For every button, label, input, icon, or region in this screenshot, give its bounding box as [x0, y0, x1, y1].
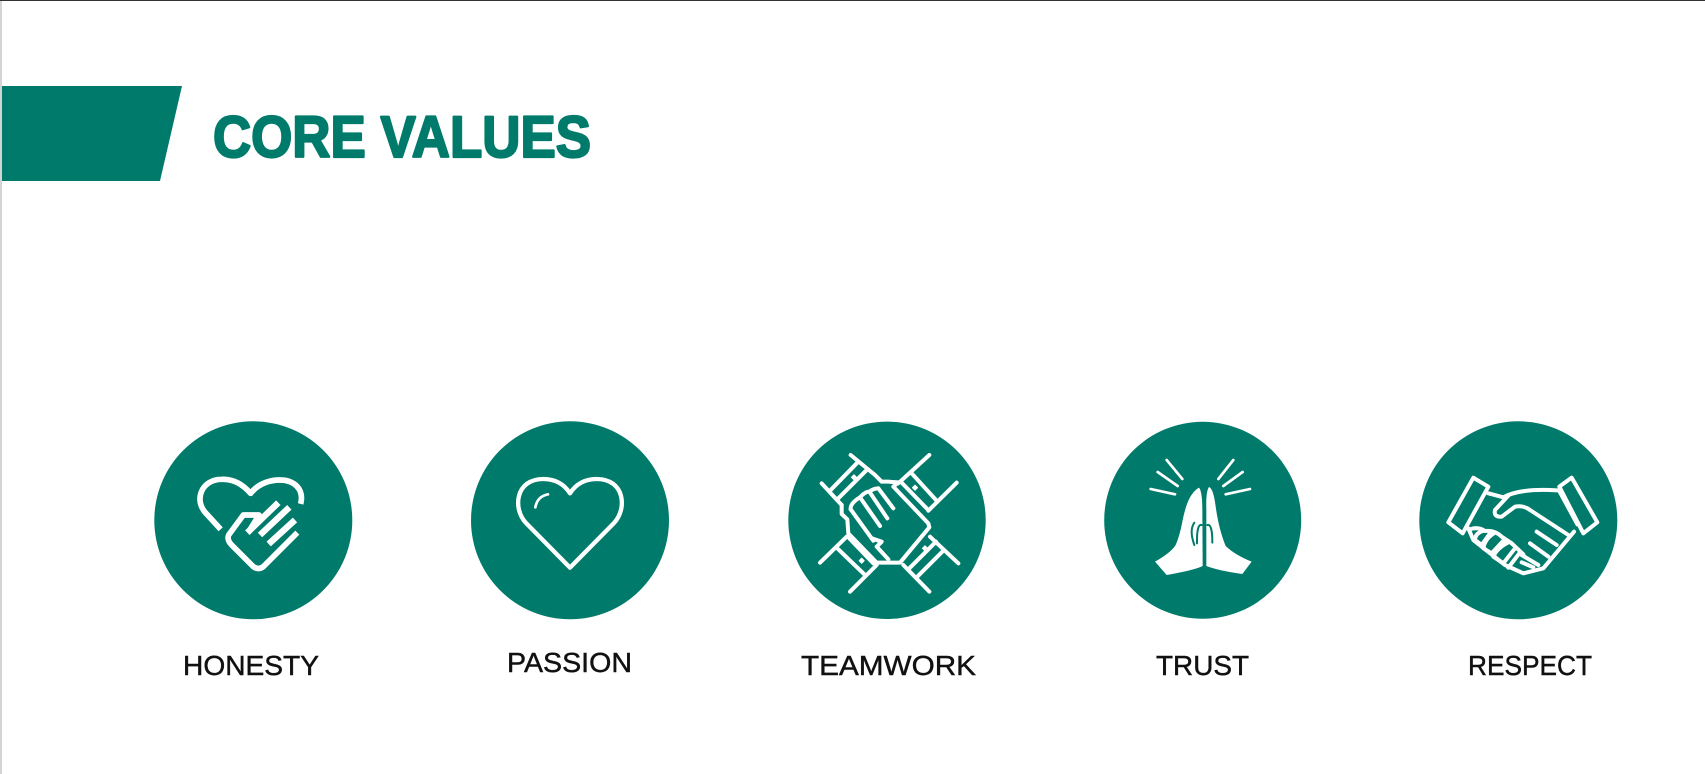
label: passion: PASSION: [507, 647, 632, 678]
icon: heart: [518, 479, 622, 568]
icon: praying hands: [1151, 460, 1252, 575]
arm: top left: [822, 455, 875, 505]
circle: honesty: [154, 421, 352, 619]
circle: trust: [1104, 422, 1301, 619]
arm: top right: [898, 455, 957, 511]
value: passion: [471, 421, 669, 678]
title: CORE VALUES: [213, 105, 591, 170]
circle: teamwork: [788, 422, 986, 619]
value: respect: [1419, 421, 1617, 681]
label: honesty: HONESTY: [183, 650, 319, 681]
icon: handshake: [1448, 478, 1597, 573]
value: teamwork: [788, 422, 986, 681]
circle: passion: [471, 421, 669, 619]
label: respect: RESPECT: [1468, 650, 1592, 681]
value: trust: [1104, 422, 1301, 681]
icon: heart with hand: [200, 479, 301, 568]
label: teamwork: TEAMWORK: [801, 650, 976, 681]
circle: respect: [1419, 421, 1617, 619]
value: honesty: [154, 421, 352, 681]
arm: bottom right: [903, 537, 958, 592]
clasped hands: [842, 475, 929, 563]
banner shape: [2, 86, 182, 181]
label: trust: TRUST: [1156, 650, 1249, 681]
icon: joined hands: [820, 455, 958, 592]
arm: bottom left: [820, 537, 877, 592]
